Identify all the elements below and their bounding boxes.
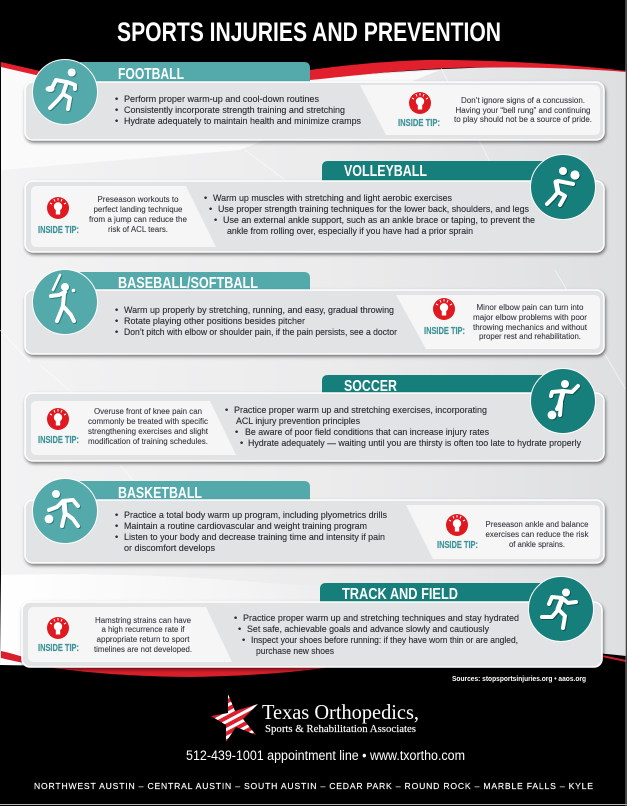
inside tip: basketball — [437, 514, 589, 551]
list: football tips: Hydrate adequately to maintain health and minimize cramps — [124, 116, 361, 126]
panel: track and field — [22, 576, 602, 667]
sources: Sources: stopsportsinjuries.org • aaos.org — [452, 674, 586, 683]
inside tip: soccer: strengthening exercises and slight — [88, 426, 209, 436]
list: basketball tips: or discomfort develops — [124, 543, 215, 553]
card — [22, 602, 602, 667]
inside tip: track and field: Hamstring strains can have — [95, 615, 191, 625]
inside tip: basketball: exercises can reduce the risk — [486, 529, 589, 539]
inside tip: football: INSIDE TIP: — [398, 117, 440, 129]
list: football tips: • — [115, 94, 118, 104]
red swoosh top — [1, 60, 626, 80]
card — [25, 181, 604, 252]
inside tip: volleyball: Preseason workouts to — [98, 194, 179, 204]
list: track and field tips: Set safe, achievable goals and advance slowly and cautiously — [247, 624, 489, 634]
heading tab: basketball — [80, 481, 310, 502]
panel: soccer — [25, 368, 604, 461]
list: baseball tips: • — [115, 305, 118, 315]
list: volleyball tips: • — [209, 204, 212, 214]
card — [25, 393, 604, 461]
list: track and field tips: Inspect your shoes before running: if they have worn thin or are angled, — [251, 635, 518, 645]
inside tip: football: to play should not be a source of pride. — [454, 114, 592, 124]
list: volleyball tips: Warm up muscles with stretching and light aerobic exercises — [213, 193, 452, 203]
inside tip: baseball: Minor elbow pain can turn into — [476, 302, 584, 312]
inside tip: baseball: INSIDE TIP: — [424, 325, 465, 337]
inside tip: track and field: timelines are not developed. — [94, 644, 192, 654]
list: baseball tips: Rotate playing other positions besides pitcher — [124, 316, 305, 326]
inside tip: track and field: a high recurrence rate if — [102, 624, 185, 634]
inside tip: baseball: major elbow problems with poor — [473, 312, 587, 322]
icon: football player — [32, 60, 98, 124]
tip background — [31, 401, 236, 455]
list: basketball tips: • — [115, 510, 118, 520]
inside tip: football — [398, 92, 592, 129]
heading tab: soccer: SOCCER — [344, 378, 397, 395]
panel: volleyball — [25, 154, 604, 252]
icon: baseball batter — [32, 270, 98, 334]
inside tip: baseball: proper rest and rehabilitation. — [479, 331, 581, 341]
list: soccer tips: • — [235, 427, 238, 437]
icon: volleyball player — [530, 154, 596, 220]
icon: striped star — [211, 694, 258, 742]
list: football tips: • — [115, 105, 118, 115]
list: baseball tips: • — [115, 316, 118, 326]
inside tip: track and field: appropriate return to sport — [96, 634, 190, 644]
inside tip: basketball: INSIDE TIP: — [437, 539, 478, 551]
panel: basketball — [25, 478, 604, 563]
list: basketball tips: • — [115, 532, 118, 542]
icon: soccer player — [530, 368, 596, 434]
inside tip: soccer: modification of training schedules. — [88, 436, 208, 446]
contact line: 512-439-1001 appointment line • www.txortho.com — [186, 748, 465, 763]
list: soccer tips: Be aware of poor field conditions that can increase injury rates — [245, 427, 489, 437]
list: track and field tips: purchase new shoes — [256, 646, 334, 656]
red swoosh bottom — [1, 651, 626, 677]
inside tip: soccer: INSIDE TIP: — [38, 434, 79, 446]
list: volleyball tips: Use an external ankle support, such as an ankle brace or taping, to prevent the — [223, 215, 535, 225]
heading tab: volleyball — [322, 161, 545, 182]
list: football tips: Perform proper warm-up and cool-down routines — [124, 94, 319, 104]
list: baseball tips: Don’t pitch with elbow or shoulder pain, if the pain persists, see a doctor — [124, 327, 397, 337]
heading tab: basketball: BASKETBALL — [118, 485, 202, 502]
inside tip: track and field: INSIDE TIP: — [38, 642, 79, 654]
panel: baseball/softball — [25, 270, 604, 354]
inside tip: baseball — [424, 298, 588, 341]
list: baseball tips — [115, 305, 397, 337]
list: football tips: • — [115, 116, 118, 126]
list: volleyball tips: • — [214, 215, 217, 225]
inside tip: volleyball: from a jump can reduce the — [89, 214, 187, 224]
list: track and field tips: • — [238, 624, 241, 634]
tip background — [28, 607, 232, 662]
list: baseball tips: Warm up properly by stretching, running, and easy, gradual throwing — [124, 305, 394, 315]
list: football tips — [115, 94, 361, 126]
tip background — [396, 295, 600, 349]
tip background — [31, 186, 216, 247]
light content background — [1, 66, 626, 668]
list: baseball tips: • — [115, 327, 118, 337]
heading tab: football: FOOTBALL — [118, 66, 184, 83]
card — [25, 82, 604, 140]
list: basketball tips: • — [115, 521, 118, 531]
inside tip: soccer: Overuse front of knee pain can — [94, 406, 202, 416]
tip background — [406, 505, 600, 559]
title: SPORTS INJURIES AND PREVENTION — [117, 17, 501, 47]
inside tip: basketball: of ankle sprains. — [509, 539, 565, 549]
inside tip: baseball: throwing mechanics and without — [473, 322, 588, 332]
inside tip: track and field — [38, 615, 192, 654]
inside tip: soccer: commonly be treated with specific — [88, 416, 209, 426]
inside tip: volleyball: INSIDE TIP: — [38, 224, 79, 236]
list: track and field tips — [234, 613, 519, 656]
card — [25, 290, 604, 354]
list: soccer tips: • — [240, 438, 243, 448]
inside tip: basketball: Preseason ankle and balance — [486, 519, 589, 529]
list: soccer tips: Hydrate adequately — waiting until you are thirsty is often too late to hydrate properly — [248, 438, 581, 448]
heading tab: baseball/softball — [80, 272, 310, 292]
heading tab: football — [80, 62, 310, 83]
logo: Texas Orthopedics — [211, 694, 419, 742]
tip background — [360, 85, 600, 135]
list: track and field tips: Practice proper warm up and stretching techniques and stay hydrated — [243, 613, 519, 623]
inside tip: volleyball: perfect landing technique — [94, 204, 183, 214]
icon: basketball player — [32, 478, 98, 544]
list: volleyball tips: • — [204, 193, 207, 203]
heading tab: track and field: TRACK AND FIELD — [342, 586, 458, 603]
list: basketball tips — [115, 510, 387, 553]
locations: NORTHWEST AUSTIN – CENTRAL AUSTIN – SOUTH AUSTIN – CEDAR PARK – ROUND ROCK – MARBLE FALLS – KYLE — [34, 781, 593, 791]
list: track and field tips: • — [234, 613, 237, 623]
heading tab: baseball/softball: BASEBALL/SOFTBALL — [118, 275, 258, 292]
card — [25, 500, 604, 563]
list: soccer tips: ACL injury prevention principles — [236, 416, 360, 426]
list: soccer tips: Practice proper warm up and stretching exercises, incorporating — [234, 405, 487, 415]
logo: Texas Orthopedics: Texas Orthopedics, — [262, 700, 419, 724]
heading tab: track and field — [320, 583, 545, 603]
list: soccer tips: • — [225, 405, 228, 415]
panel: football — [25, 60, 604, 140]
list: soccer tips — [225, 405, 581, 448]
list: football tips: Consistently incorporate strength training and stretching — [124, 105, 345, 115]
inside tip: football: Having your “bell rung” and continuing — [456, 105, 591, 115]
inside tip: football: Don’t ignore signs of a concussion. — [461, 95, 585, 105]
list: volleyball tips: ankle from rolling over, especially if you have had a prior sprain — [227, 226, 473, 236]
icon: runner — [528, 576, 594, 642]
logo: Texas Orthopedics: Sports & Rehabilitation Associates — [265, 723, 416, 735]
heading tab: volleyball: VOLLEYBALL — [344, 163, 427, 180]
list: basketball tips: Maintain a routine cardiovascular and weight training program — [124, 521, 367, 531]
inside tip: volleyball — [38, 194, 187, 236]
heading tab: soccer — [322, 375, 545, 395]
list: basketball tips: Listen to your body and decrease training time and intensity if pain — [124, 532, 385, 542]
inside tip: soccer — [38, 406, 209, 446]
list: track and field tips: • — [242, 635, 245, 645]
inside tip: volleyball: risk of ACL tears. — [108, 224, 168, 234]
list: basketball tips: Practice a total body warm up program, including plyometrics drills — [124, 510, 387, 520]
list: volleyball tips — [204, 193, 535, 236]
list: volleyball tips: Use proper strength training techniques for the lower back, shoulders, and legs — [218, 204, 529, 214]
